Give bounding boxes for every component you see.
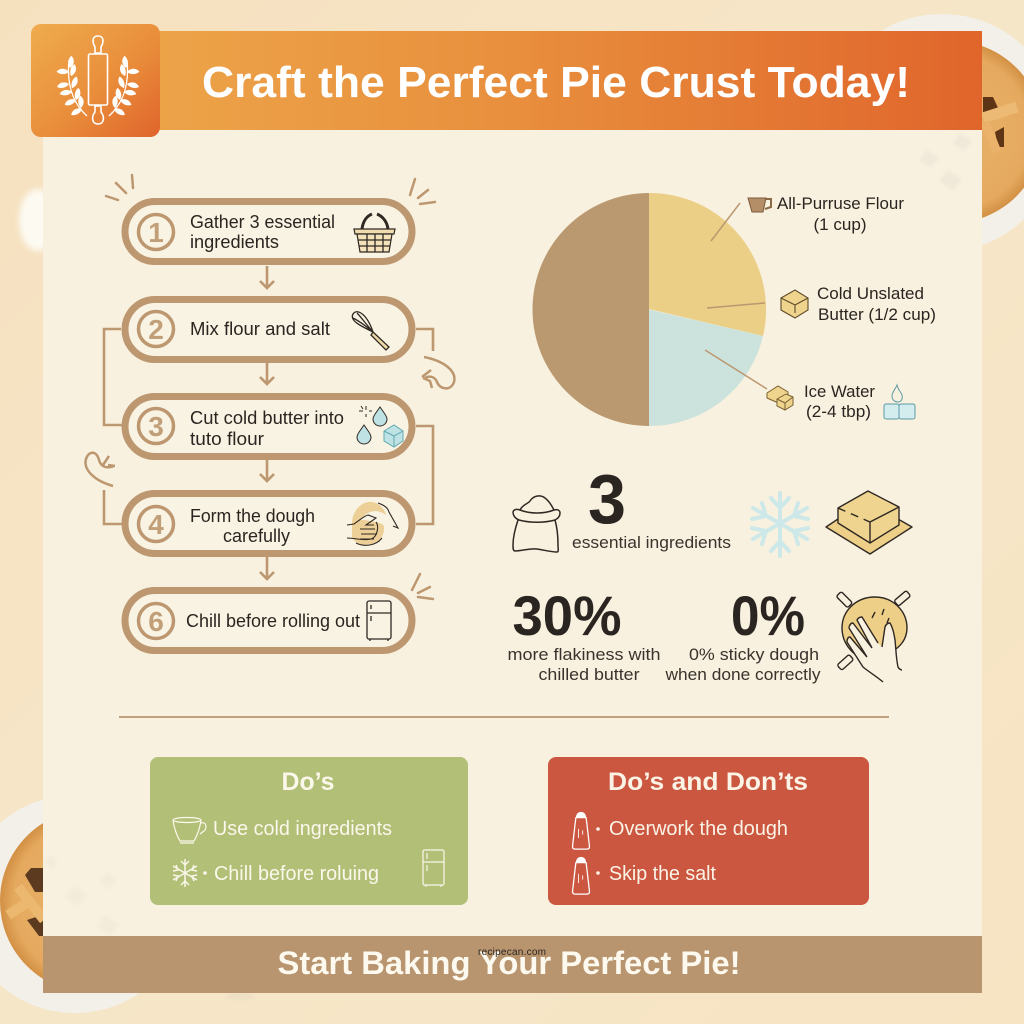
step 2: Mix flour and salt — [190, 319, 330, 339]
step 1: 1 — [148, 217, 164, 248]
sparkle accents — [106, 175, 435, 599]
icon: salt shaker — [572, 812, 590, 849]
icon: water drops and ice cube — [357, 406, 403, 447]
step 3: tuto flour — [190, 429, 264, 449]
watermark: recipecan.com — [478, 947, 546, 958]
step 6 — [125, 590, 412, 650]
panel: don'ts: Skip the salt — [609, 863, 716, 885]
stat: 3 essential ingredients: 3 — [588, 460, 626, 538]
step arrows — [260, 266, 274, 579]
stat: 0% sticky dough: when done correctly — [664, 665, 821, 684]
footer banner: Start Baking Your Perfect Pie! — [278, 945, 740, 981]
section divider — [119, 716, 889, 718]
icon: butter block — [781, 290, 808, 318]
icon: fridge — [367, 601, 391, 641]
stat: 3 essential ingredients: essential ingredients — [572, 533, 731, 552]
panel: don'ts: Overwork the dough — [609, 818, 788, 840]
pie label: flour: All-Purruse Flour — [777, 195, 905, 213]
pie label: butter — [781, 285, 936, 324]
step 1: ingredients — [190, 232, 279, 252]
bottom left pie dish — [0, 795, 187, 1013]
icon: hand pressing dough — [836, 591, 911, 688]
panel: do's: Use cold ingredients — [213, 818, 392, 840]
icon: flour sack — [513, 496, 560, 552]
icon: whisk — [352, 312, 389, 350]
step 1 — [125, 202, 412, 262]
stat: 0% sticky dough: 0% sticky dough — [689, 645, 819, 664]
step 3: Cut cold butter into — [190, 408, 344, 428]
step 6: 6 — [148, 606, 164, 637]
step 2 — [125, 300, 412, 360]
stat: 3 essential ingredients — [513, 460, 731, 552]
pie label: butter: Butter (1/2 cup) — [818, 306, 936, 324]
icon: white fridge — [423, 850, 444, 887]
stat: 30% flakiness: chilled butter — [538, 665, 640, 684]
icon: salt shaker — [572, 857, 590, 894]
header banner — [43, 31, 982, 130]
icon: hands kneading dough — [347, 502, 398, 545]
icon: cup — [748, 198, 771, 212]
stat: 30% flakiness — [508, 584, 660, 684]
panel: don'ts — [548, 757, 869, 905]
top right pie dish — [823, 14, 1024, 252]
icon badge: rolling pin and wheat — [31, 24, 160, 137]
icon: ice cubes — [884, 385, 915, 419]
step 4: Form the dough — [190, 506, 315, 526]
step 4: 4 — [148, 509, 164, 540]
panel: don'ts: Do’s and Don’ts — [608, 768, 808, 796]
pie chart — [532, 193, 767, 426]
panel: do's: Chill before roluing — [214, 863, 379, 885]
pie label: ice water: Ice Water — [804, 383, 876, 401]
flowchart connectors — [86, 329, 454, 524]
icon: butter on dish — [826, 491, 912, 554]
pie label: flour — [748, 195, 905, 234]
pie label: ice water: (2-4 tbp) — [806, 403, 871, 421]
icon: basket — [354, 214, 395, 252]
step 4 — [125, 494, 412, 554]
title: Craft the Perfect Pie Crust Today! — [202, 58, 910, 107]
step 3 — [125, 396, 412, 456]
icon: white snowflake — [173, 859, 197, 887]
step 6: Chill before rolling out — [186, 611, 360, 631]
icon: butter cubes — [767, 386, 793, 410]
stat: 0% sticky dough — [664, 584, 821, 684]
step 1: Gather 3 essential — [190, 212, 335, 232]
stat: 0% sticky dough: 0% — [731, 584, 805, 647]
stat: 30% flakiness: more flakiness with — [508, 645, 660, 664]
pie label: ice water — [767, 383, 915, 421]
step 3: 3 — [148, 411, 164, 442]
stat: 30% flakiness: 30% — [512, 584, 622, 647]
panel: do's — [150, 757, 468, 905]
icon: snowflake — [752, 493, 808, 556]
step 2: 2 — [148, 314, 164, 345]
main cream panel — [43, 130, 982, 936]
panel: do's: Do’s — [282, 768, 334, 796]
icon: cup outline — [173, 818, 206, 843]
step 4: carefully — [223, 526, 290, 546]
pie label: flour: (1 cup) — [814, 216, 866, 234]
pie label: butter: Cold Unslated — [817, 285, 924, 303]
footer banner — [43, 936, 982, 993]
